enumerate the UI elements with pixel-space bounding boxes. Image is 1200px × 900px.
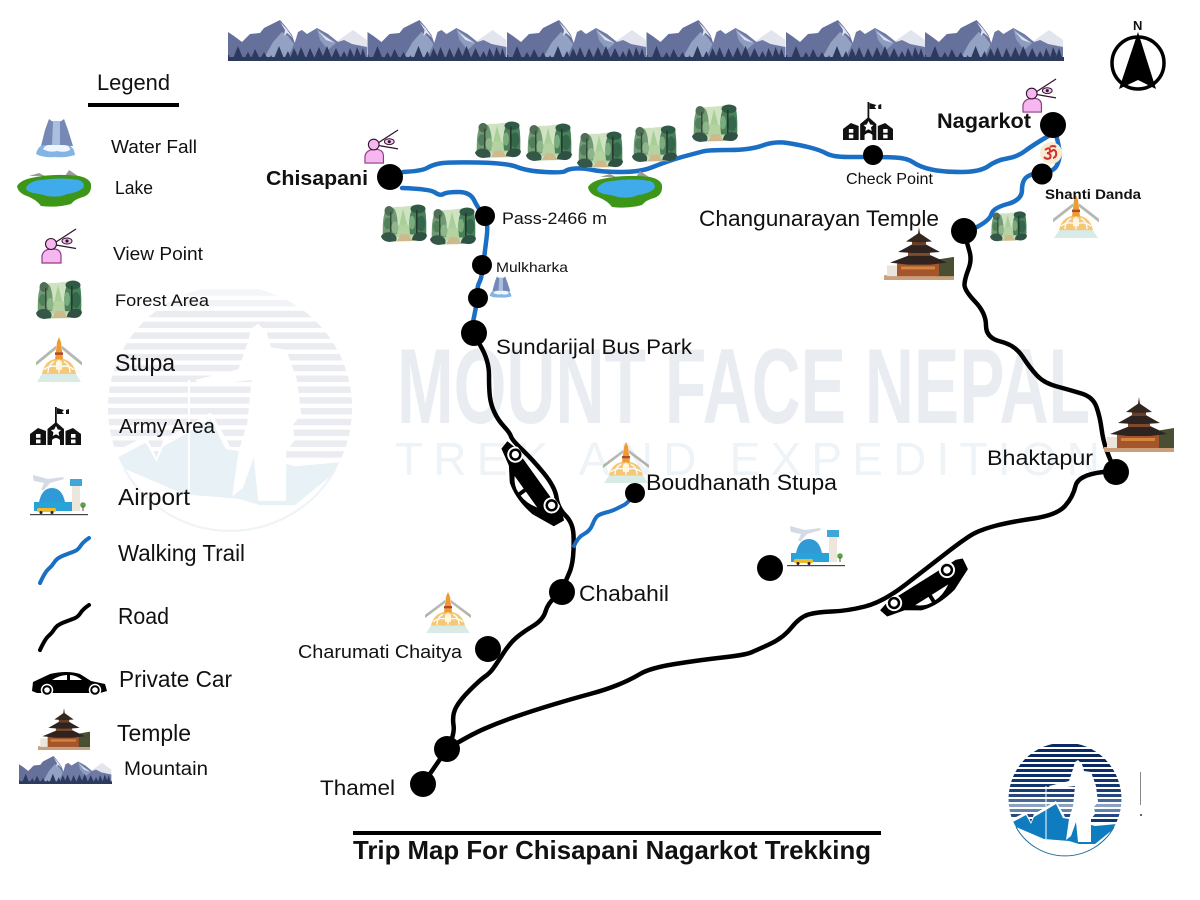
legend: airport xyxy=(30,475,191,515)
place labels: Chisapani xyxy=(266,168,368,190)
icon: view point Nagarkot xyxy=(1023,79,1056,112)
place labels: Changunarayan Temple xyxy=(699,206,939,231)
legend: forest area: Forest Area xyxy=(115,291,210,310)
road: Bhaktapur to Changunarayan xyxy=(964,231,1116,472)
place labels: Nagarkot xyxy=(937,110,1031,133)
road: Thamel to Sundarijal xyxy=(423,345,574,784)
icon: Bhaktapur temple xyxy=(1104,397,1174,452)
company logo xyxy=(1008,744,1142,856)
watermark logo xyxy=(107,289,353,531)
north compass xyxy=(1112,18,1164,89)
legend: water fall: Water Fall xyxy=(111,137,197,157)
place labels: Charumati Chaitya xyxy=(298,642,463,662)
legend: mountain: Mountain xyxy=(124,759,208,780)
icon: Charumati stupa xyxy=(425,592,471,633)
legend: temple: Temple xyxy=(117,720,191,746)
legend xyxy=(17,70,245,784)
title: Trip Map For Chisapani Nagarkot Trekking xyxy=(353,835,871,865)
place labels: Chabahil xyxy=(579,581,669,606)
icon: om symbol xyxy=(1040,142,1062,164)
icon: Boudhanath stupa xyxy=(603,442,649,483)
walking trail: Sundarijal to Chisapani xyxy=(402,188,487,322)
mountain banner xyxy=(228,20,1064,61)
legend: walking trail: Walking Trail xyxy=(118,540,245,566)
road: Thamel to Bhaktapur xyxy=(447,472,1103,749)
icon: car on Sundarijal road xyxy=(487,438,569,535)
north compass: N xyxy=(1133,18,1142,33)
legend: mountain xyxy=(19,756,208,784)
place labels: Shanti Danda xyxy=(1045,186,1141,202)
legend: army area: Army Area xyxy=(119,416,216,438)
walking trail: Chisapani to Nagarkot xyxy=(403,135,1050,172)
walking trail: Boudhanath branch xyxy=(574,493,635,546)
place labels: Sundarijal Bus Park xyxy=(496,336,693,359)
forest icons xyxy=(381,104,1027,245)
icon: car on Bhaktapur road xyxy=(877,554,976,631)
legend: road xyxy=(40,603,169,650)
icon: lake xyxy=(588,171,662,208)
place labels: Boudhanath Stupa xyxy=(646,470,838,495)
legend: forest area xyxy=(36,280,210,319)
watermark company name xyxy=(395,326,1100,485)
place labels: Check Point xyxy=(846,171,934,188)
icon: Changunarayan temple xyxy=(884,227,954,280)
legend: private car xyxy=(32,666,232,696)
icon: view point Chisapani xyxy=(365,130,398,163)
legend: view point xyxy=(42,229,203,264)
place labels: Mulkharka xyxy=(496,259,568,275)
legend: walking trail xyxy=(40,538,245,583)
legend title: Legend xyxy=(97,70,170,95)
place labels: Bhaktapur xyxy=(987,447,1093,470)
place labels: Thamel xyxy=(320,777,395,800)
icon: waterfall xyxy=(490,277,511,298)
legend: airport: Airport xyxy=(118,484,191,510)
legend: temple xyxy=(38,708,191,750)
icon: Shanti Danda stupa xyxy=(1053,195,1099,238)
legend: private car: Private Car xyxy=(119,666,232,692)
icon: airport xyxy=(787,526,845,566)
legend: army area xyxy=(30,407,216,445)
legend: view point: View Point xyxy=(113,244,203,264)
place labels: Pass-2466 m xyxy=(502,209,607,228)
walking trail: Nagarkot to Changunarayan xyxy=(977,135,1060,227)
place labels xyxy=(266,110,1141,800)
legend: stupa: Stupa xyxy=(115,350,176,377)
legend title xyxy=(88,70,179,107)
watermark company name: TREK AND EXPEDITION xyxy=(395,433,1100,485)
legend: road: Road xyxy=(118,603,169,629)
legend: lake xyxy=(17,170,153,207)
icon: army check point xyxy=(843,102,893,140)
legend: stupa xyxy=(36,337,176,382)
legend: water fall xyxy=(36,119,197,157)
location markers xyxy=(377,112,1129,797)
legend: lake: Lake xyxy=(115,178,153,198)
